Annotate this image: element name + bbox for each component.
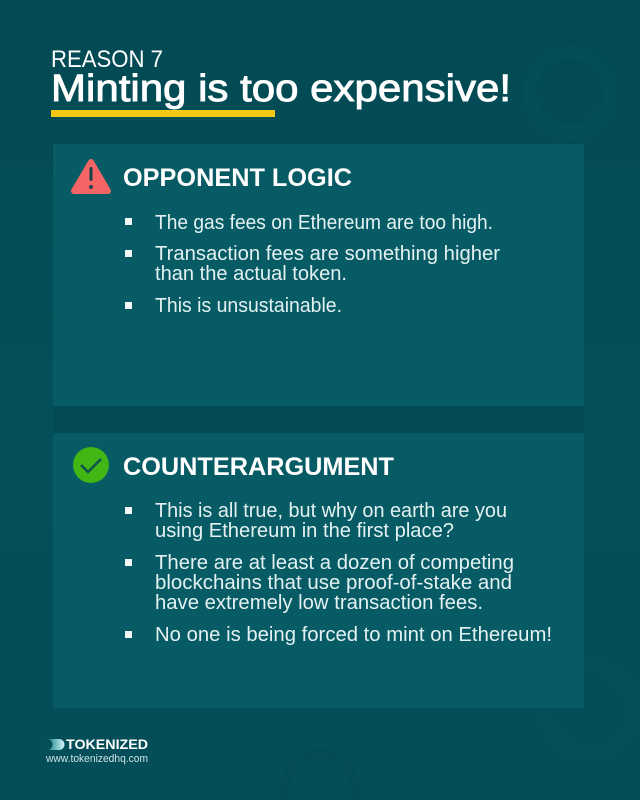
- bullet list: counterargument: blockchains that use proof-of-stake and: [155, 572, 512, 594]
- icon: green check circle: [73, 447, 109, 483]
- bullet list: opponent logic: This is unsustainable.: [155, 295, 342, 317]
- icon: warning triangle: [74, 162, 108, 191]
- yellow underline: [51, 110, 275, 117]
- eyebrow: reason number: REASON 7: [51, 46, 163, 73]
- website url: www.tokenizedhq.com: [45, 753, 148, 765]
- title block: [51, 46, 511, 117]
- bullet list: counterargument: No one is being forced to mint on Ethereum!: [155, 624, 552, 646]
- heading: opponent logic: OPPONENT LOGIC: [123, 164, 352, 192]
- main heading: Minting is too expensive!: [51, 68, 511, 110]
- heading: counterargument: COUNTERARGUMENT: [123, 453, 394, 481]
- bullet list: opponent logic: Transaction fees are something higher: [155, 243, 500, 265]
- bullet list: counterargument: [125, 500, 552, 646]
- bullet list: opponent logic: [125, 212, 500, 317]
- bullet list: opponent logic: The gas fees on Ethereum are too high.: [155, 212, 493, 234]
- bullet list: counterargument: have extremely low transaction fees.: [155, 592, 483, 614]
- panel: opponent logic: [53, 144, 584, 406]
- icon: tokenized mark: [47, 739, 64, 750]
- footer logo: [45, 737, 148, 765]
- wordmark: TOKENIZED: [66, 737, 148, 752]
- panel: counterargument: [53, 433, 584, 708]
- bullet list: counterargument: This is all true, but why on earth are you: [155, 500, 507, 522]
- bullet list: counterargument: using Ethereum in the first place?: [155, 520, 454, 542]
- bullet list: opponent logic: than the actual token.: [155, 263, 347, 285]
- bullet list: counterargument: There are at least a dozen of competing: [155, 552, 514, 574]
